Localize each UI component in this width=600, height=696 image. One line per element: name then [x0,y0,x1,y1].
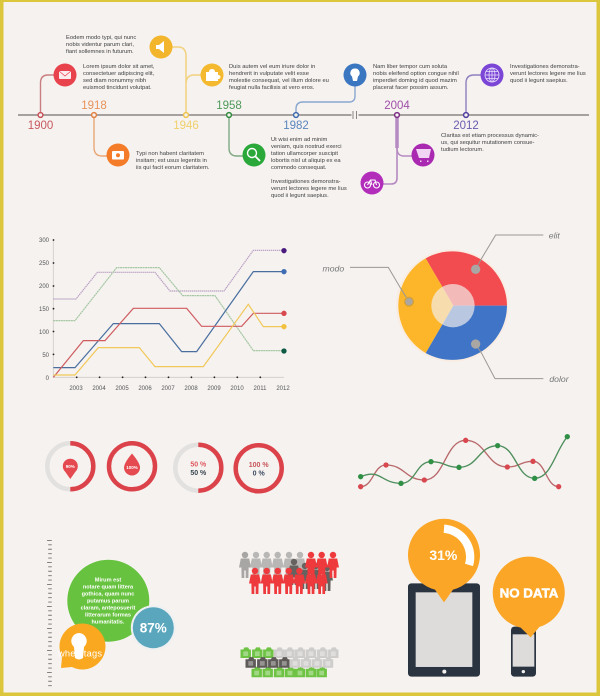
event 1958 [216,100,347,199]
event 1982: imperdiet doming id quod mazim [373,78,457,84]
x axis labels [69,386,290,392]
tablet body [408,583,480,677]
event 2004 [360,100,434,194]
grey people [239,552,306,578]
event 1918 [81,100,210,171]
event 1946: nobis videntur parum clari, [66,42,134,48]
ring: drop 100%: 100% [126,465,138,470]
event 1958: verunt lectores legere me lius [271,186,347,192]
green bubble: claram, anteposuerit [81,606,135,612]
inner circle [431,284,475,327]
event 1918: insitam; est usus legentis in [136,158,207,164]
orange bulb bubble: whee tags [57,648,102,658]
y axis labels [39,238,50,382]
callout 31%: 31% [429,547,458,563]
people pictogram [239,552,339,594]
event 1918: 1918 [81,100,107,112]
event 2004: 2004 [384,100,410,112]
timeline axis [18,114,589,116]
event 1946: feugiat nulla facilisis at vero eros. [229,85,315,91]
dark blocks [246,657,289,668]
event 1900 [28,64,155,132]
event 1958: Ut wisi enim ad minim [271,137,328,143]
ruler [48,540,50,687]
green bubble [66,559,150,643]
x axis labels: 2010 [230,386,244,392]
tablet screen [416,592,472,667]
green bubble: gothica, quam nunc [82,592,134,598]
event 1958: Investigationes demonstra- [271,179,341,185]
green bubble: putamus parum [87,598,129,604]
event 1982: nobis eleifend option congue nihil [373,71,459,77]
y axis labels: 250 [39,261,50,267]
axis break [353,111,356,119]
event 1900: consectetuer adipiscing elit, [83,71,155,77]
chart series [53,248,287,377]
x axis labels: 2004 [92,386,106,392]
ring: 50 / 50 [175,445,221,491]
event 1958: veniam, quis nostrud exerci [271,144,342,150]
event 2012: verunt lectores legere me lius [510,71,586,77]
blue percentage bubble: 87% [140,620,167,636]
home button [442,670,446,674]
y axis labels: 150 [39,307,50,313]
event 1918: iis qui facit eorum claritatem. [136,165,210,171]
line chart [39,238,290,392]
event 1958: 1958 [216,100,242,112]
y axis labels: 0 [46,376,50,382]
red people [249,552,339,594]
slice: dolor [426,306,507,360]
x axis labels: 2003 [69,386,83,392]
callout 31% [408,519,480,602]
red series [358,438,561,489]
ring: 50 / 50: 50 % [190,470,207,477]
event 1946: Duis autem vel eum iriure dolor in [229,64,315,70]
orange bulb bubble [57,624,105,670]
event 2012: 2012 [453,120,479,132]
pie chart [323,230,570,384]
event 2012: us, qui sequitur mutationem consue- [441,140,535,146]
event 1900: sed diam nonummy nibh [83,78,146,84]
pie chart: dolor [549,374,570,384]
green blocks [240,647,327,677]
x axis labels: 2009 [207,386,221,392]
event 1958: tation ullamcorper suscipit [271,151,338,157]
event 1958: lobortis nisl ut aliquip ex ea [271,158,341,164]
event 1982: placerat facer possim assum. [373,85,449,91]
event 2012 [441,64,586,153]
slice: elit [426,251,507,306]
event 1982: 1982 [283,120,309,132]
green bubble: notare quam littera [83,585,134,591]
event 2012: quod ii legunt saepius. [510,78,568,84]
event 1900: Lorem ipsum dolor sit amet, [83,64,155,70]
y axis labels: 300 [39,238,50,244]
dark people [288,559,333,591]
phone with callout [493,557,565,677]
event 1918: Typi non habent claritatem [136,151,204,157]
event 1946: fiant sollemnes in futurum. [66,49,134,55]
y and x tick dots [53,239,261,378]
block pictogram [240,647,338,677]
event 1900: 1900 [28,120,53,132]
y axis labels: 200 [39,284,50,290]
event 1946: 1946 [173,120,199,132]
phone screen [513,634,534,667]
event 1946: hendrerit in vulputate velit esse [229,71,309,77]
green bubble: litterarum formas [85,612,131,618]
ring: drop 100% [109,443,155,489]
ring: 100 / 0: 100 % [249,462,269,469]
y axis labels: 100 [39,330,50,336]
event 2012: Claritas est etiam processus dynamic- [441,133,539,139]
home button [522,670,525,673]
event 1982 [283,64,459,132]
phone body [511,627,536,677]
event 1946: Eodem modo typi, qui nunc [66,35,136,41]
event 2012: Investigationes demonstra- [510,64,580,70]
blue percentage bubble [131,605,176,650]
green series [358,434,570,486]
light grey blocks [274,647,338,668]
ring: pin 90%: 90% [66,464,75,469]
pie halo [396,249,509,362]
y axis labels: 50 [42,353,50,359]
x axis labels: 2012 [276,386,290,392]
x axis labels: 2008 [184,386,198,392]
x axis labels: 2005 [115,386,129,392]
timeline [18,35,589,199]
green bubble: Mirum est [95,578,121,584]
chart axes [53,240,284,377]
pie labels: elit [549,230,560,240]
ring: pin 90% [47,443,93,489]
event 1982: Nam liber tempor cum soluta [373,64,448,70]
event 1946 [66,35,329,132]
green bubble: humanitatis. [92,620,125,626]
leader lines [350,235,543,379]
pie chart: modo [323,263,344,273]
bubble cluster [48,540,176,687]
smooth line chart [358,434,570,489]
event 1900: euismod tincidunt volutpat. [83,85,152,91]
event 2012: tudium lectorum. [441,147,484,153]
slice: modo [398,258,453,353]
leader dots [405,265,480,349]
ring: 100 / 0 [236,445,282,491]
progress rings [47,443,282,491]
ring: 100 / 0: 0 % [253,470,266,477]
x axis labels: 2011 [254,386,267,392]
event 1958: quod ii legunt saepius. [271,193,329,199]
tablet with callout [408,519,480,677]
x axis labels: 2007 [161,386,175,392]
event 1946: molestie consequat, vel illum dolore eu [229,78,329,84]
callout no data: NO DATA [500,586,559,601]
ring: 50 / 50: 50 % [190,462,207,469]
x axis labels: 2006 [138,386,152,392]
event 1958: commodo consequat. [271,165,327,171]
